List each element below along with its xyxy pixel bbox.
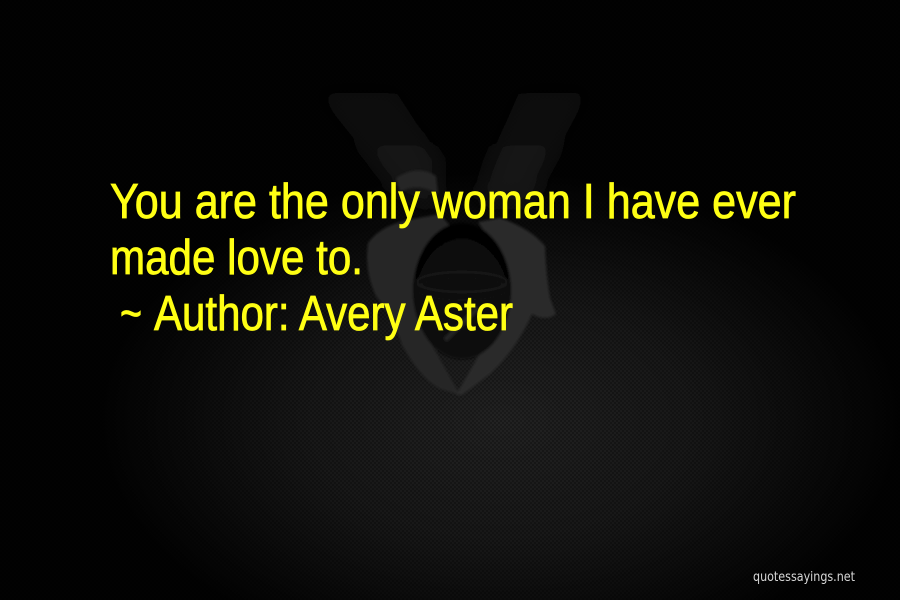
illustration: cupped hands — [367, 170, 556, 395]
icon: jar held in hands — [413, 223, 511, 359]
icon: right hand — [456, 218, 556, 395]
icon: bracelet — [396, 170, 438, 194]
author attribution: Author: Avery Aster — [154, 287, 513, 341]
illustration: arms — [315, 90, 590, 205]
author attribution: ~ — [120, 287, 142, 341]
quote line 1: You are the only woman I have ever — [110, 175, 796, 229]
quote line 2: made love to. — [110, 231, 363, 285]
icon: left hand — [367, 214, 460, 395]
watermark: quotessayings.net — [753, 570, 855, 585]
quote text — [110, 175, 796, 341]
